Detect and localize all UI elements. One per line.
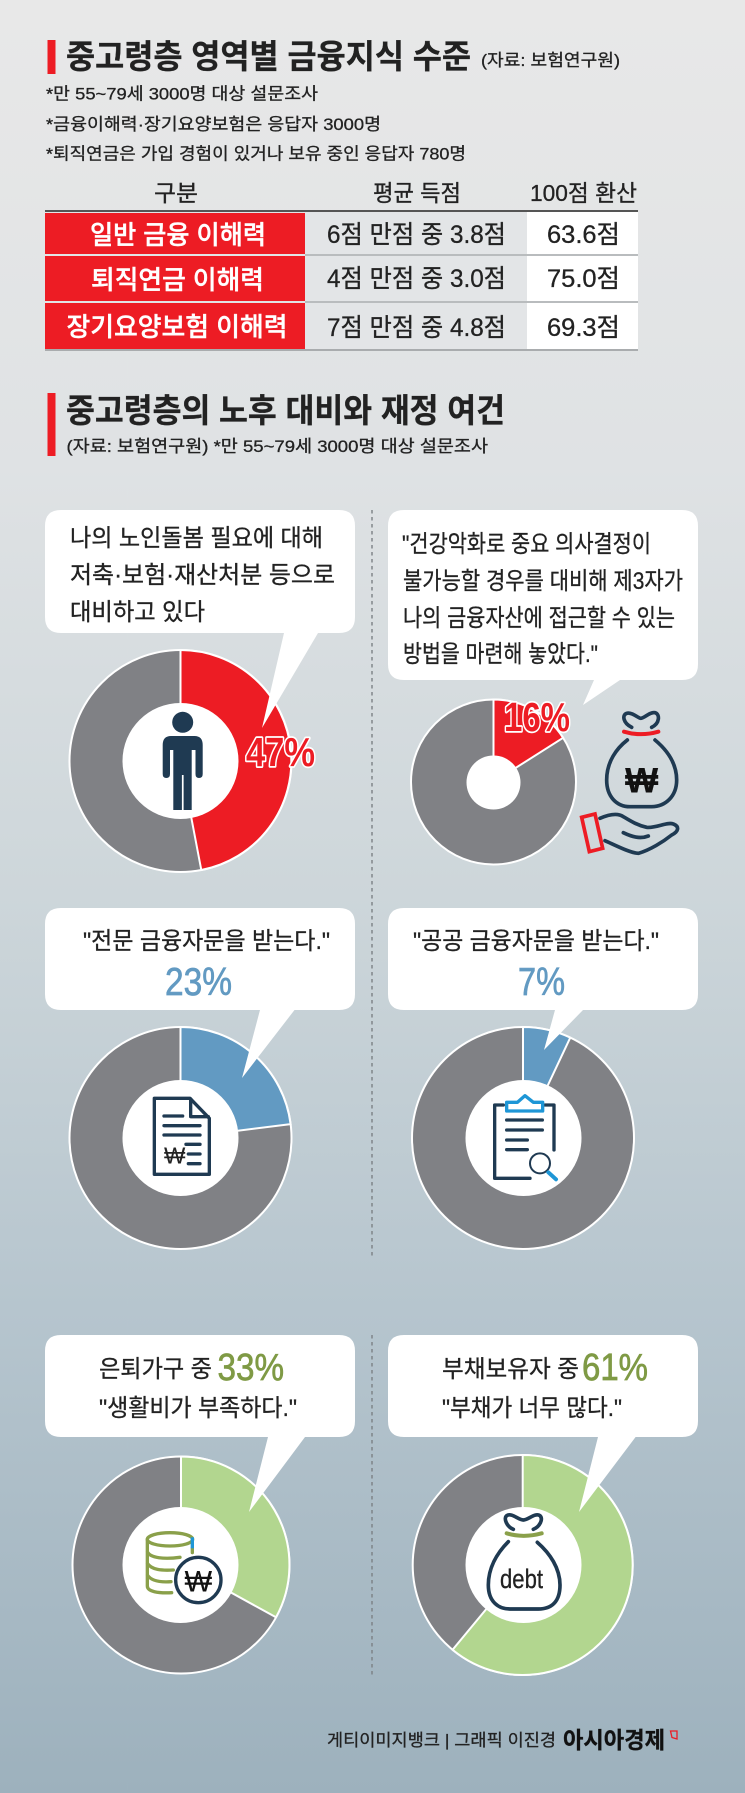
icon: document with won sign <box>154 1098 209 1174</box>
heading: retirement preparation: (자료: 보험연구원) *만 55~79세 3000명 대상 설문조사 <box>66 437 488 456</box>
row: long-term care insurance: 7점 만점 중 4.8점 <box>327 314 506 342</box>
dashed dividers <box>371 510 373 1677</box>
speech bubble: 부채보유자 중 <box>442 1356 579 1383</box>
speech bubble: 나의 노인돌봄 필요에 대해 <box>70 525 323 552</box>
heading: retirement preparation <box>48 392 505 456</box>
row: long-term care insurance <box>45 303 620 349</box>
speech bubble: "생활비가 부족하다." <box>99 1395 297 1422</box>
speech bubble: 23% <box>165 961 232 1004</box>
row: general finance: 63.6점 <box>547 221 620 249</box>
donut chart: 61% <box>413 1455 633 1675</box>
icon: debt money bag <box>488 1515 560 1609</box>
panel: 16% decision proxy <box>388 510 698 864</box>
icon: coins with won sign: ₩ <box>184 1565 212 1598</box>
icon label: debt: debt <box>500 1564 543 1594</box>
donut chart: 16% <box>411 700 576 864</box>
speech bubble: 은퇴가구 중 <box>99 1356 212 1383</box>
value label: 16%: 16% <box>504 694 570 740</box>
panel: 47% care preparation <box>45 510 355 872</box>
panel: 23% professional advice <box>45 908 355 1249</box>
speech bubble: 대비하고 있다 <box>70 599 205 626</box>
speech bubble: "부채가 너무 많다." <box>442 1395 622 1422</box>
row: long-term care insurance: 69.3점 <box>547 314 620 342</box>
speech bubble: 33% <box>218 1347 284 1389</box>
row: general finance <box>45 213 620 254</box>
speech bubble: 방법을 마련해 놓았다." <box>403 641 598 668</box>
speech bubble: "전문 금융자문을 받는다." <box>83 928 330 955</box>
row: retirement pension: 75.0점 <box>547 265 620 293</box>
footer credits: 아시아경제 <box>563 1727 665 1753</box>
speech bubble: "공공 금융자문을 받는다." <box>413 928 659 955</box>
survey notes: *퇴직연금은 가입 경험이 있거나 보유 중인 응답자 780명 <box>46 144 466 164</box>
speech bubble <box>45 908 355 1078</box>
speech bubble: 불가능할 경우를 대비해 제3자가 <box>403 568 683 595</box>
table header: 100점 환산 <box>530 180 637 206</box>
donut chart: 33% <box>72 1456 290 1674</box>
row: retirement pension: 퇴직연금 이해력 <box>91 265 264 295</box>
heading: retirement preparation: 중고령층의 노후 대비와 재정 여건 <box>66 392 505 429</box>
survey notes: *금융이해력·장기요양보험은 응답자 3000명 <box>46 115 381 134</box>
icon: coins with won sign <box>147 1533 221 1603</box>
icon: document with won sign: ₩ <box>164 1142 186 1168</box>
table header: 평균 득점 <box>373 180 461 206</box>
speech bubble <box>388 510 698 705</box>
donut chart: 23% <box>70 1027 292 1249</box>
heading: financial knowledge level: (자료: 보험연구원) <box>481 51 620 70</box>
icon: money bag over hand <box>582 713 678 853</box>
heading: financial knowledge level: 중고령층 영역별 금융지식 수준 <box>66 38 471 75</box>
icon: person <box>163 712 203 810</box>
speech bubble: 7% <box>518 961 565 1004</box>
row: retirement pension <box>45 256 620 301</box>
donut chart: 7% <box>412 1027 634 1249</box>
table header <box>154 180 637 206</box>
survey notes: *만 55~79세 3000명 대상 설문조사 <box>46 84 318 104</box>
table: literacy scores <box>45 180 638 351</box>
row: retirement pension: 4점 만점 중 3.0점 <box>327 265 506 293</box>
value label: 47%: 47% <box>246 729 315 775</box>
icon: clipboard with magnifier <box>495 1096 556 1179</box>
speech bubble <box>45 510 355 728</box>
speech bubble: 저축·보험·재산처분 등으로 <box>70 562 335 589</box>
donut chart: 47% <box>70 650 292 872</box>
table header: 구분 <box>154 180 198 206</box>
speech bubble <box>45 1335 355 1512</box>
footer credits: 게티이미지뱅크 | 그래픽 이진경 <box>327 1731 556 1750</box>
panel: 33% living costs <box>45 1335 355 1674</box>
icon: money bag over hand: ₩ <box>625 762 659 801</box>
footer credits <box>327 1727 677 1753</box>
survey notes <box>46 84 466 164</box>
panel: 61% excessive debt <box>388 1335 698 1675</box>
row: long-term care insurance: 장기요양보험 이해력 <box>66 312 288 342</box>
panel: 7% public advice <box>388 908 698 1249</box>
speech bubble <box>388 1335 698 1512</box>
speech bubble: "건강악화로 중요 의사결정이 <box>402 531 651 558</box>
speech bubble: 61% <box>582 1347 648 1389</box>
row: general finance: 6점 만점 중 3.8점 <box>327 221 506 249</box>
row: general finance: 일반 금융 이해력 <box>90 220 266 250</box>
speech bubble: 나의 금융자산에 접근할 수 있는 <box>403 605 675 632</box>
speech bubble <box>388 908 698 1050</box>
